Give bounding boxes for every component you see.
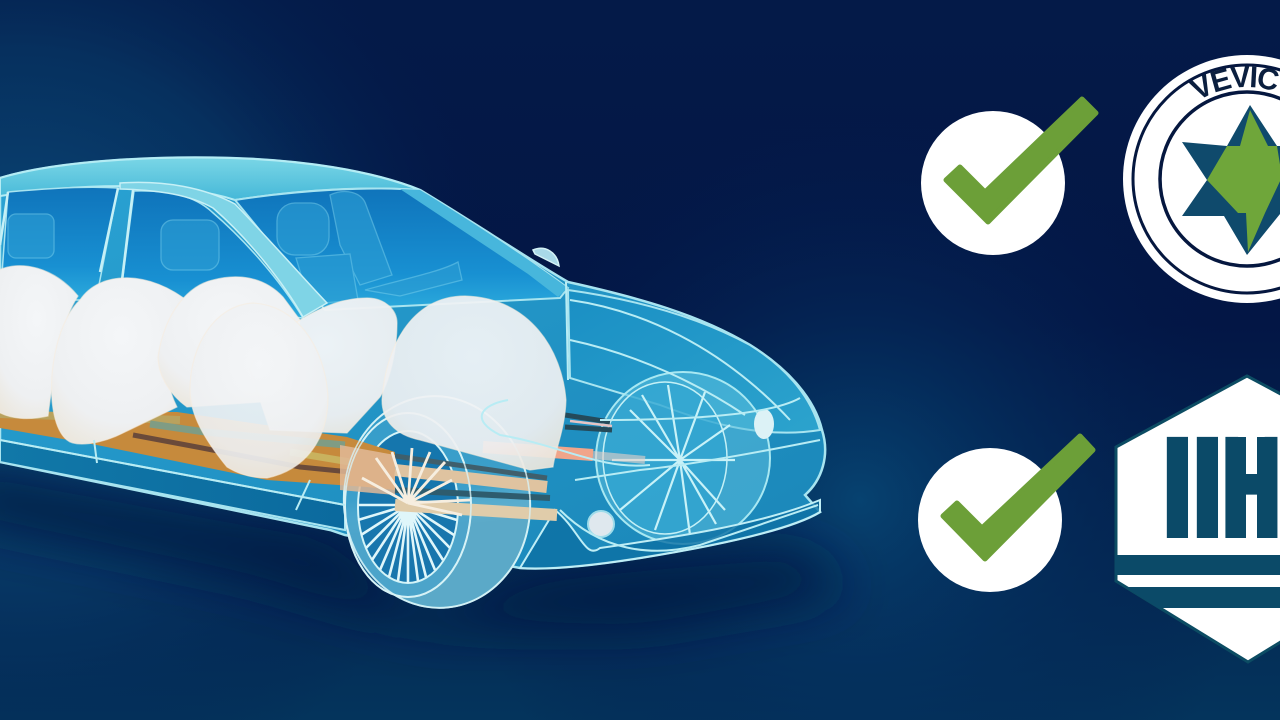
windshield and front seats xyxy=(235,188,568,310)
airbag: third xyxy=(158,277,300,407)
airbag: fourth xyxy=(190,303,328,478)
seats xyxy=(8,192,462,304)
airbag: front xyxy=(382,296,566,470)
car body shell xyxy=(0,158,825,569)
airbag: rear xyxy=(0,266,78,418)
hood panels xyxy=(568,290,820,433)
car ground shadow xyxy=(0,470,850,625)
near wheel upper spoke fan xyxy=(362,448,470,515)
badge letters: I xyxy=(1187,406,1228,570)
underbody stripes xyxy=(0,412,645,515)
star xyxy=(1182,105,1280,255)
front bumper panel xyxy=(520,500,820,569)
roof panel xyxy=(0,158,420,200)
B-pillars xyxy=(0,188,133,280)
windshield pale edge band xyxy=(400,189,568,297)
airbag: front seat side xyxy=(250,298,397,433)
seal lettering: VEVIC xyxy=(1188,66,1279,98)
seal: round safety logo xyxy=(1123,55,1280,303)
front fender line work xyxy=(0,282,820,551)
A-pillar xyxy=(120,182,327,317)
far wheel xyxy=(596,372,770,544)
lower door panel xyxy=(0,440,345,530)
badge: IIHS hexagon logo xyxy=(1115,376,1280,662)
middle window xyxy=(120,191,303,318)
badge letters: I xyxy=(1157,406,1198,570)
rear window xyxy=(0,187,118,300)
transparent car xyxy=(0,158,825,617)
side mirror xyxy=(533,248,559,266)
near wheel outline xyxy=(333,387,541,617)
check mark: bottom xyxy=(918,436,1093,592)
check mark: top xyxy=(921,99,1096,255)
badge letters xyxy=(1166,436,1278,538)
near wheel base xyxy=(333,387,541,617)
star green centre xyxy=(1207,110,1280,252)
badge bars xyxy=(1115,555,1280,608)
badge xyxy=(754,409,774,439)
fog lamp xyxy=(588,511,614,537)
airbags xyxy=(0,266,566,478)
airbag: second xyxy=(52,278,190,444)
